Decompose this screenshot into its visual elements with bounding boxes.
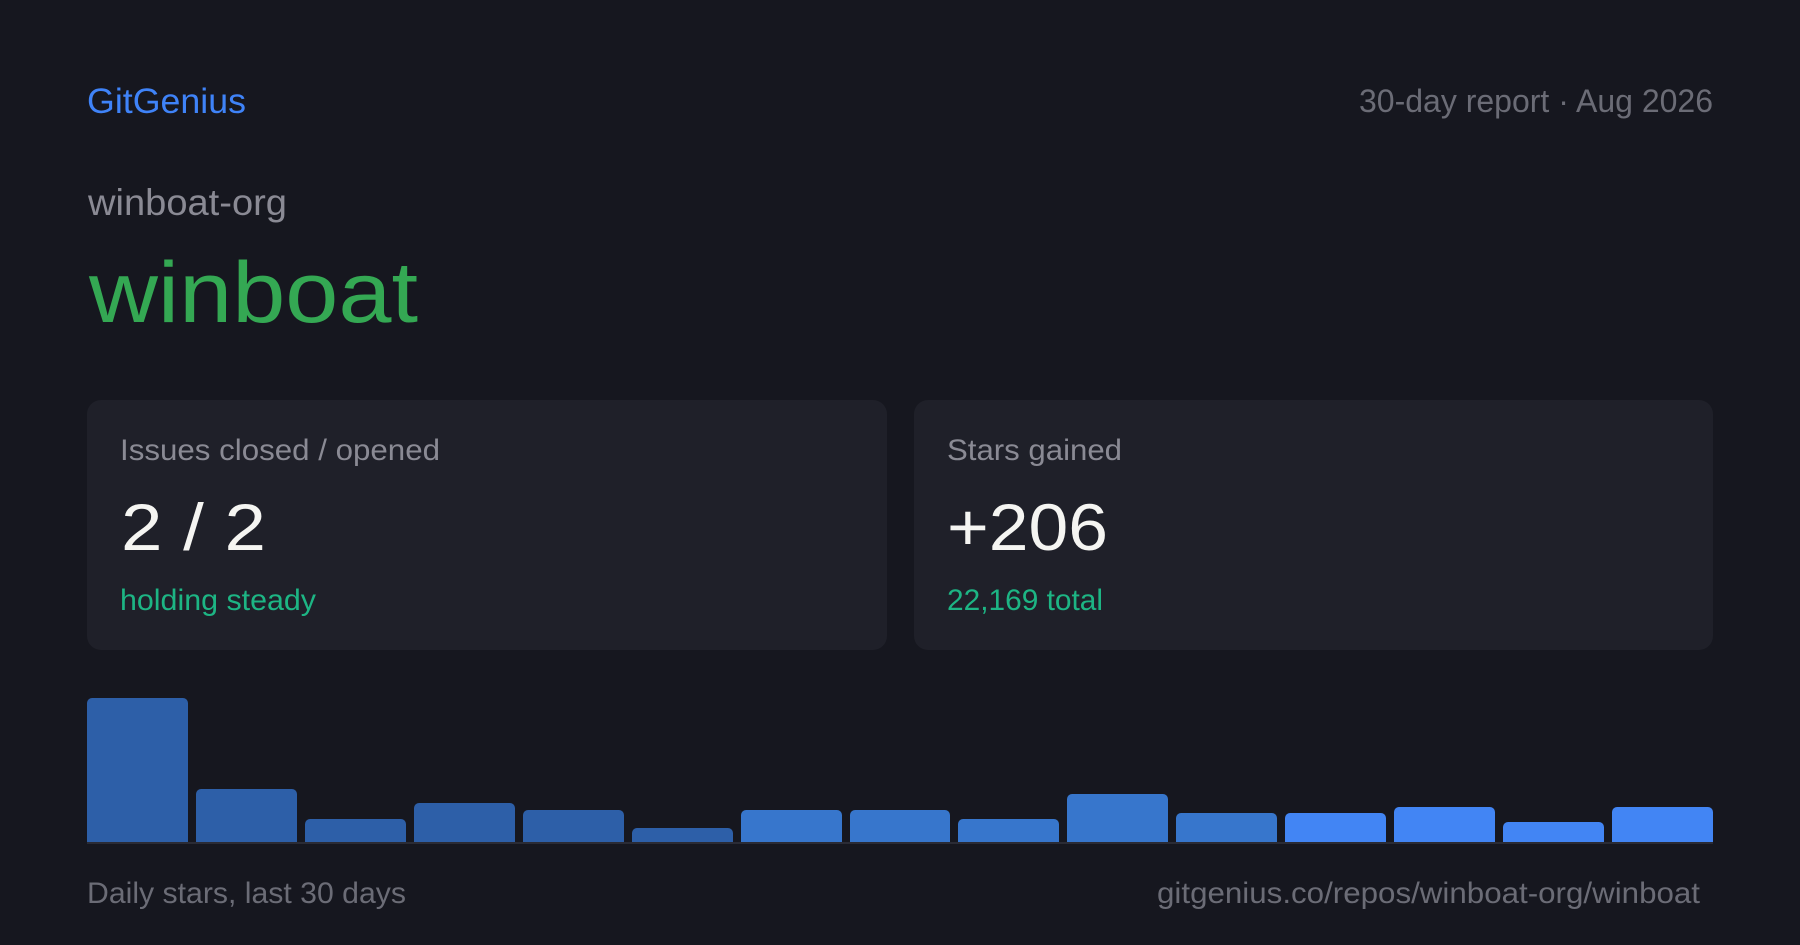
stars value: +206 (947, 490, 1108, 564)
repository url: gitgenius.co/repos/winboat-org/winboat (1157, 877, 1701, 910)
brand name: GitGenius (87, 82, 246, 121)
stars label: Stars gained (947, 434, 1122, 467)
stars total: 22,169 total (947, 584, 1103, 617)
panel: stars gained (914, 400, 1713, 650)
panel: issues closed / opened (87, 400, 887, 650)
repository owner: winboat-org (87, 182, 287, 223)
repository title: winboat (88, 245, 418, 341)
chart caption: Daily stars, last 30 days (87, 877, 406, 910)
report period: 30-day report · Aug 2026 (1359, 83, 1713, 119)
bar chart: daily stars (87, 698, 1713, 844)
issues value: 2 / 2 (121, 490, 266, 564)
issues note: holding steady (120, 584, 316, 617)
issues label: Issues closed / opened (120, 434, 440, 467)
